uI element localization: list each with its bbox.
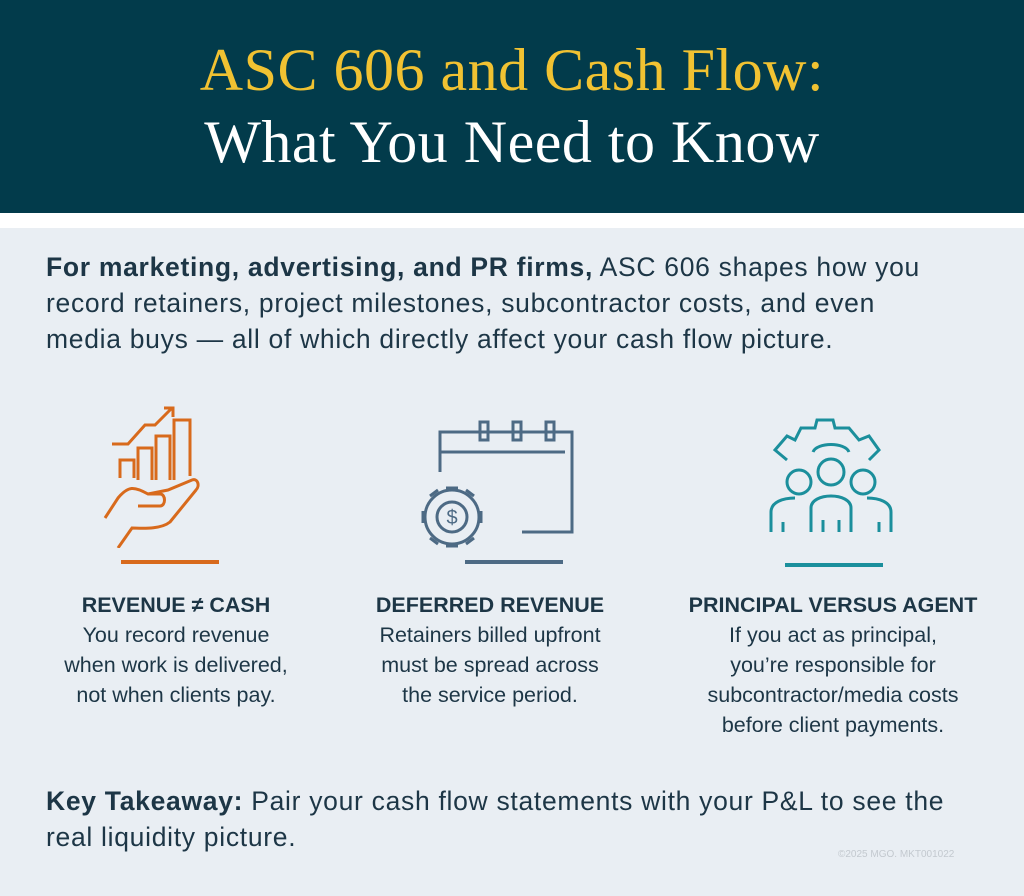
column: deferred revenue — [376, 593, 604, 707]
underline: col3 — [785, 563, 883, 567]
intro text: record retainers, project milestones, subcontractor costs, and even — [46, 288, 875, 318]
column: deferred revenue: DEFERRED REVENUE — [376, 593, 604, 617]
column: principal vs agent: before client payments. — [722, 713, 944, 737]
column: revenue vs cash: REVENUE ≠ CASH — [82, 593, 270, 617]
column: principal vs agent: If you act as principal, — [729, 623, 937, 647]
header: title: What You Need to Know — [204, 109, 820, 175]
icon: calendar with dollar gear: $ — [446, 507, 458, 529]
column: principal vs agent: you’re responsible for — [730, 653, 936, 677]
intro text — [46, 252, 920, 354]
column: principal vs agent: subcontractor/media costs — [708, 683, 958, 707]
column: deferred revenue: Retainers billed upfront — [379, 623, 601, 647]
header: title — [0, 0, 1024, 213]
column: revenue vs cash: when work is delivered, — [64, 653, 288, 677]
column: revenue vs cash — [64, 593, 288, 707]
column: revenue vs cash: You record revenue — [83, 623, 269, 647]
icon: calendar with dollar gear — [422, 420, 574, 548]
column: principal vs agent — [689, 593, 978, 737]
column: deferred revenue: must be spread across — [381, 653, 599, 677]
icon: team with gear — [770, 418, 892, 532]
key takeaway — [46, 786, 944, 852]
key takeaway: Key Takeaway: Pair your cash flow statements with your P&L to see the — [46, 786, 944, 816]
icon: hand with growth chart — [104, 406, 200, 548]
underline: col1 — [121, 560, 219, 564]
underline: col2 — [465, 560, 563, 564]
column: revenue vs cash: not when clients pay. — [76, 683, 276, 707]
intro text: For marketing, advertising, and PR firms, ASC 606 shapes how you — [46, 252, 920, 282]
key takeaway: real liquidity picture. — [46, 822, 296, 852]
intro text: media buys — all of which directly affect your cash flow picture. — [46, 324, 833, 354]
copyright: ©2025 MGO. MKT001022 — [838, 849, 954, 860]
column: deferred revenue: the service period. — [402, 683, 578, 707]
column: principal vs agent: PRINCIPAL VERSUS AGENT — [689, 593, 977, 617]
header: title: ASC 606 and Cash Flow: — [200, 37, 824, 103]
